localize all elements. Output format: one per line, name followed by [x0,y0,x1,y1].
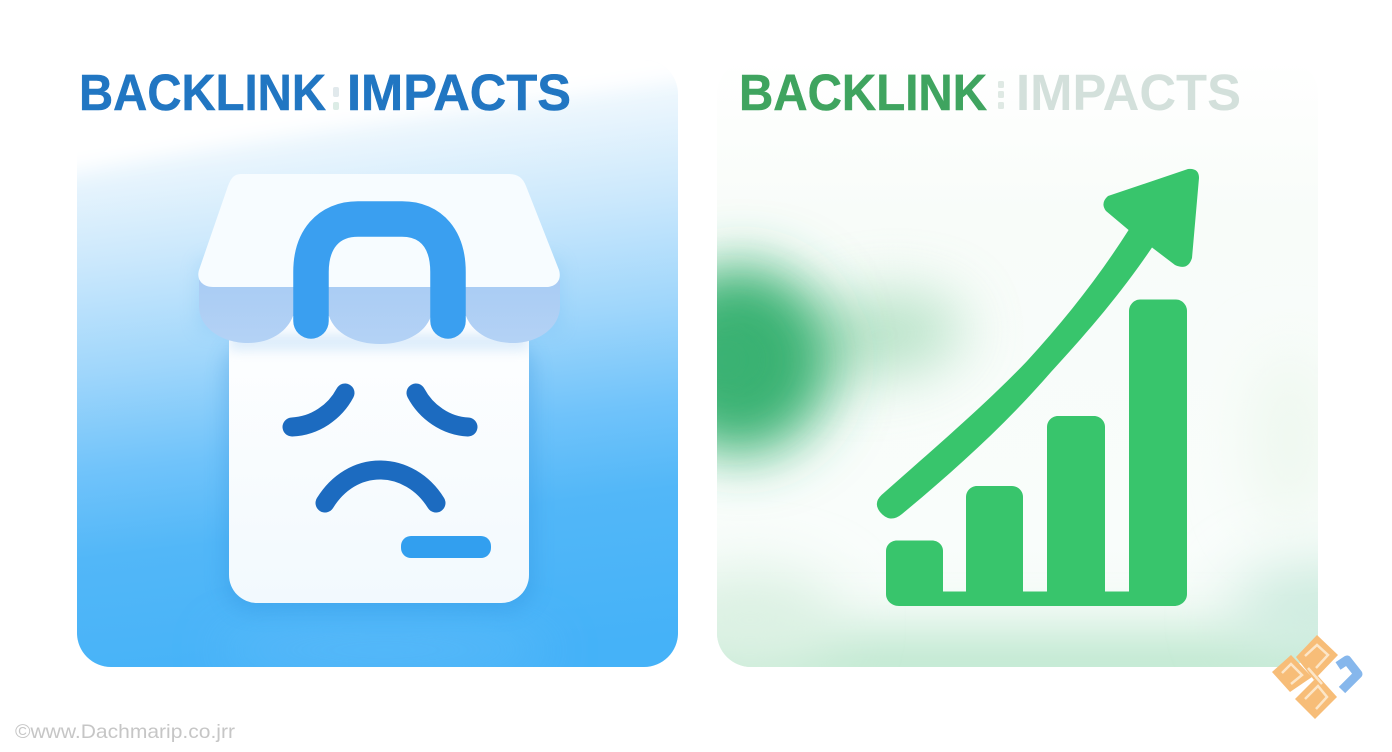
title: backlink impacts blue: IMPACTS [347,64,571,121]
title: backlink impacts green: IMPACTS [1016,64,1241,121]
awning shadow [199,260,560,330]
awning top [198,174,560,287]
title: backlink impacts blue: BACKLINK [79,64,326,121]
panel: negative impact (blue) [77,74,678,667]
right eyebrow [416,393,468,427]
store shadow [224,340,534,612]
logo watermark [1272,635,1358,719]
dash [401,536,491,558]
bag handle [311,219,448,321]
panel: positive impact (green) [717,74,1318,667]
bar 3 [1047,416,1105,592]
store body [229,300,529,603]
orange diamonds [1272,635,1338,719]
awning valance [199,280,560,344]
chart: rising bars with arrow [877,169,1199,606]
blue bracket [1338,660,1358,690]
watermark text: ©www.Dachmarip.co.jrr [15,721,236,743]
frown mouth [325,470,436,503]
title: backlink impacts blue [79,64,571,121]
title: backlink impacts green [739,64,1241,121]
shadow under awning [229,334,529,350]
chart base [886,592,1187,606]
icon: sad storefront [198,174,560,612]
left eyebrow [292,393,345,427]
bar 1 [886,540,943,592]
growth arrow [877,169,1199,519]
bar 2 [966,486,1023,592]
title: backlink impacts green: BACKLINK [739,64,987,121]
bar 4 [1129,300,1187,592]
